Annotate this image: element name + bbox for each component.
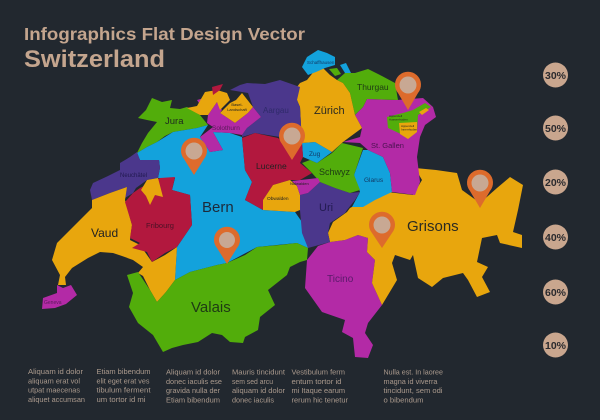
stat: 60%: 60%: [545, 287, 567, 299]
label: Zug: Zug: [309, 151, 321, 158]
label: Obwalden: Obwalden: [267, 196, 289, 202]
text block 3: Etiam bibendum: [166, 396, 220, 404]
region: Basel west yellow: [187, 90, 230, 115]
text block 2: Etiam bibendum: [96, 367, 150, 376]
label: Nidwalden: Nidwalden: [290, 181, 309, 186]
enclave: Fribourg yellow: [141, 178, 163, 205]
region: Uri: [300, 182, 360, 248]
stat: 60%: [543, 280, 568, 304]
region: St. Gallen: [343, 98, 436, 195]
stat: 20%: [543, 170, 568, 194]
stat: 40%: 40%: [545, 232, 567, 244]
region: Glarus: [352, 150, 392, 207]
label: Glarus: Glarus: [364, 177, 384, 184]
map of Switzerland: [42, 50, 523, 358]
region: Grisons: [328, 168, 523, 305]
label: Geneva: Geneva: [44, 300, 62, 306]
region: Schaffhausen: [302, 50, 335, 75]
label: Appenzell Ausserrhoden: Ausserrhoden: [389, 118, 408, 122]
text block 2: tibulum ferment: [96, 386, 150, 395]
region: Bern: [137, 125, 308, 280]
icon: map pin Aargau: [279, 123, 305, 160]
region: Ticino: [305, 235, 382, 358]
text block 3: donec iaculis ese: [166, 377, 222, 386]
stat: 50%: 50%: [545, 123, 567, 135]
region: Lucerne: [242, 133, 312, 210]
region: Solothurn fragment: [197, 97, 208, 104]
label: Thurgau: Thurgau: [357, 82, 389, 92]
text block 4: sem sed arcu: [232, 377, 273, 386]
enclave: Appenzell yellow: [419, 108, 429, 115]
region: Appenzell Ausserrhoden: [387, 103, 431, 135]
region: Jura: [137, 98, 208, 153]
label: Zürich: Zürich: [314, 105, 345, 117]
text block 6: tincidunt, sem odi: [384, 386, 443, 395]
region: Valais: [127, 243, 308, 352]
text block 5: entum tortor id: [292, 377, 342, 386]
text block 5: mi Itaque earum: [292, 386, 345, 395]
region: Appenzell Innerrhoden: [399, 122, 417, 139]
label: Valais: Valais: [191, 299, 231, 316]
text block 1: Aliquam id dolor: [28, 367, 84, 376]
region: Thurgau fragment: [329, 68, 341, 76]
label: Appenzell Innerrhoden: Innerrhoden: [401, 128, 418, 132]
stat: 10%: 10%: [545, 340, 567, 352]
icon: map pin Bern: [214, 227, 240, 264]
label: Basel-Landschaft: Landschaft: [227, 107, 248, 112]
label: St. Gallen: St. Gallen: [371, 141, 404, 150]
label: Uri: Uri: [319, 202, 333, 214]
label: Schwyz: Schwyz: [319, 167, 351, 177]
text block 5: Vestibulum ferm: [292, 368, 345, 376]
region: Zürich: [297, 68, 362, 152]
stat: 30%: [543, 62, 568, 88]
title: [24, 24, 305, 73]
region: Nidwalden: [292, 178, 320, 195]
label: Basel-Landschaft: Basel-: [231, 102, 243, 107]
text block 1: aliquam erat vol: [28, 376, 80, 385]
region: Basel-Stadt: [212, 84, 223, 95]
text block 2: um tortor id mi: [96, 395, 146, 404]
region: Geneva: [42, 285, 77, 309]
stat: 40%: [543, 224, 568, 250]
text block 3: Aliquam id dolor: [166, 368, 221, 376]
text block 2: [96, 367, 150, 404]
text block 3: gravida nulla der: [166, 386, 221, 395]
label: Solothurn: Solothurn: [212, 125, 240, 132]
region: Schwyz: [302, 143, 363, 193]
text block 6: o bibendum: [384, 396, 424, 404]
label: Schaffhausen: Schaffhausen: [307, 60, 335, 65]
text block 6: magna id viverra: [384, 377, 438, 386]
label: Ticino: Ticino: [327, 274, 354, 285]
region: Obwalden: [263, 180, 300, 212]
icon: map pin Zürich east: [395, 72, 421, 110]
stat: 20%: 20%: [545, 177, 567, 189]
text block 4: [232, 368, 286, 404]
percentage column: [543, 62, 568, 358]
stat: 10%: [543, 332, 568, 358]
text block 6: Nulla est. In laoree: [384, 368, 443, 376]
region: Fribourg: [125, 177, 192, 262]
region: Neuchatel: [90, 152, 160, 200]
region: Schaffhausen fragment: [340, 63, 351, 73]
text block 1: utpat maecenas: [28, 386, 80, 395]
region: Solothurn: [200, 102, 261, 152]
text block 1: aliquet accumsan: [28, 395, 85, 404]
label: Aargau: Aargau: [263, 106, 289, 115]
text block 5: [292, 368, 349, 404]
text block 3: [166, 368, 222, 404]
label: Fribourg: Fribourg: [146, 221, 174, 230]
text block 4: donec iaculis: [232, 396, 274, 404]
region: Aargau: [230, 80, 302, 150]
text block 4: Mauris tincidunt: [232, 368, 285, 376]
stat: 50%: [543, 116, 568, 140]
region: Basel-Landschaft: [220, 93, 253, 123]
label: Neuchatel: Neuchâtel: [120, 173, 147, 179]
text block 6: [384, 368, 443, 404]
icon: map pin Jura: [181, 138, 207, 175]
region: Thurgau: [337, 69, 398, 115]
label: Appenzell Innerrhoden: Appenzell: [401, 124, 415, 128]
region: Zug: [302, 142, 332, 163]
label: Bern: Bern: [202, 199, 234, 216]
label: Appenzell Ausserrhoden: Appenzell: [389, 114, 403, 118]
label: Lucerne: Lucerne: [256, 161, 287, 171]
text block 1: [28, 367, 85, 404]
text block 4: aliquam id dolor: [232, 386, 286, 395]
text block 5: rerum hic tenetur: [292, 396, 349, 404]
label: Grisons: Grisons: [407, 218, 459, 235]
icon: map pin Grisons west: [369, 212, 395, 248]
icon: map pin Grisons east: [467, 170, 493, 208]
title: Switzerland: [24, 46, 165, 73]
title: Infographics Flat Design Vector: [24, 24, 305, 44]
label: Vaud: Vaud: [91, 226, 118, 240]
label: Jura: Jura: [165, 116, 184, 127]
text block 2: elit eget erat ves: [96, 376, 150, 385]
stat: 30%: 30%: [545, 70, 567, 82]
region: Vaud: [52, 187, 177, 302]
